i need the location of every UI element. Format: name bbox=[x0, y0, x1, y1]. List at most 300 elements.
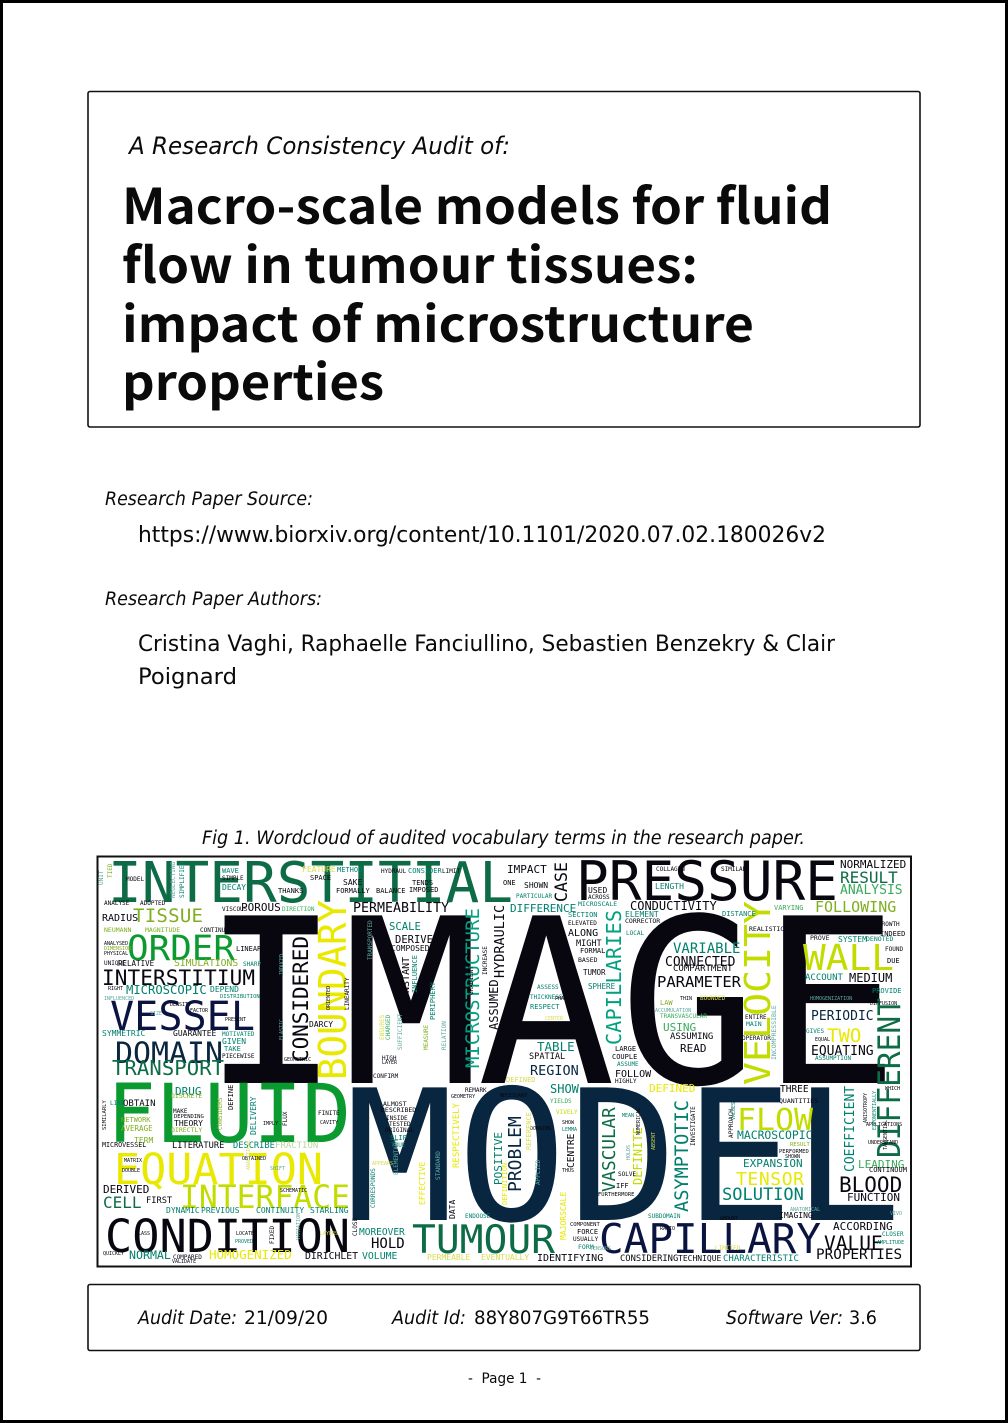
software version: 3.6 bbox=[849, 1308, 877, 1329]
small filler vocabulary: DOUBLE bbox=[122, 1168, 140, 1174]
small filler vocabulary: MICROSCALE bbox=[578, 900, 617, 908]
title bbox=[122, 168, 832, 415]
medium words: FRACTION bbox=[275, 1141, 318, 1151]
vertical words: CONSIDERED bbox=[289, 936, 313, 1062]
medium words: PERIODIC bbox=[811, 1009, 874, 1024]
medium words: DERIVED bbox=[103, 1183, 149, 1196]
medium words: HOMOGENIZED bbox=[209, 1247, 292, 1262]
medium words: PROPERTIES bbox=[816, 1247, 902, 1263]
large words: VESSEL bbox=[110, 994, 255, 1040]
small filler vocabulary: DISTANCE bbox=[722, 910, 756, 918]
small filler vocabulary: CONSIDERS bbox=[217, 1097, 224, 1130]
small filler vocabulary: THANKS bbox=[278, 887, 303, 895]
audit date: 21/09/20 bbox=[244, 1308, 328, 1329]
medium words: BLOOD bbox=[839, 1173, 902, 1197]
small filler vocabulary: TIED bbox=[107, 863, 114, 878]
small filler vocabulary: FORCE bbox=[577, 1228, 598, 1236]
small filler vocabulary: DIRECTION bbox=[282, 906, 315, 913]
small filler vocabulary: SHOWN bbox=[785, 1154, 800, 1160]
medium words: PREVIOUS bbox=[201, 1206, 240, 1215]
small filler vocabulary: NEGLECTING bbox=[170, 861, 177, 898]
audit id: 88Y807G9T66TR55 bbox=[474, 1308, 650, 1329]
vertical words bbox=[249, 862, 908, 1240]
large words: MICROSCOPIC bbox=[126, 983, 207, 997]
medium words: RESULT bbox=[840, 868, 898, 887]
small filler vocabulary: LINEARITY bbox=[344, 977, 351, 1010]
small filler vocabulary: NUMERICAL bbox=[636, 1108, 642, 1135]
small filler vocabulary: FORMALLY bbox=[336, 887, 371, 895]
small filler vocabulary: LEMMA bbox=[562, 1127, 577, 1133]
medium words: VALUE bbox=[824, 1232, 883, 1255]
large words: TISSUE bbox=[133, 905, 203, 927]
medium words: MICROVESSEL bbox=[102, 1141, 146, 1149]
small filler vocabulary: THICKNESS bbox=[530, 994, 563, 1001]
medium words: INTEGRATING bbox=[523, 1030, 576, 1039]
small filler vocabulary: VISCOUS bbox=[222, 906, 248, 913]
medium words: CONTINUITY bbox=[256, 1206, 304, 1215]
medium words: COMPARTMENT bbox=[673, 964, 733, 974]
small filler vocabulary: VARIATION bbox=[296, 1213, 302, 1240]
small filler vocabulary: FURTHERMORE bbox=[598, 1192, 634, 1198]
small filler vocabulary: SIMILAR bbox=[721, 866, 747, 873]
small filler vocabulary: SHOW bbox=[562, 1120, 575, 1126]
medium words: IMAGING bbox=[779, 1211, 813, 1220]
large words: TUMOUR bbox=[412, 1218, 556, 1263]
small filler vocabulary: DIFFUSION bbox=[870, 1001, 897, 1007]
small filler vocabulary: TENSORS bbox=[590, 1246, 611, 1252]
small filler vocabulary: WAVE bbox=[222, 867, 239, 875]
medium words: SYMMETRIC bbox=[102, 1029, 146, 1038]
small filler vocabulary: FEATURE bbox=[302, 865, 336, 874]
small filler vocabulary: LAYERS bbox=[320, 1231, 338, 1237]
small filler vocabulary: INSIDE bbox=[386, 1115, 408, 1122]
source label: Research Paper Source: bbox=[105, 489, 313, 510]
small filler vocabulary: MAKE bbox=[173, 1108, 188, 1115]
vertical words: ASSUMED bbox=[487, 979, 501, 1030]
small filler vocabulary: CONSIDER bbox=[408, 867, 443, 875]
medium words: IMPACT bbox=[507, 863, 547, 876]
small filler vocabulary: CONFIRM bbox=[373, 1073, 399, 1080]
small filler vocabulary: FLUX bbox=[282, 1111, 289, 1126]
small filler vocabulary: PERFORMED bbox=[779, 1149, 809, 1155]
vertical words: CONSTANT bbox=[401, 957, 412, 1005]
large words: PRESSURE bbox=[576, 850, 838, 913]
small filler vocabulary: QUICKLY bbox=[103, 1251, 124, 1257]
small filler vocabulary: TENDS bbox=[412, 879, 433, 887]
small filler vocabulary: APPROACH bbox=[728, 1109, 735, 1138]
small filler vocabulary: RATIO bbox=[660, 1226, 675, 1232]
medium words: VARIABLE bbox=[673, 941, 740, 957]
small filler vocabulary: CONTINUOUS bbox=[200, 927, 237, 934]
small filler vocabulary: GIVEN bbox=[222, 1037, 246, 1046]
small filler vocabulary: EFFECTIVE bbox=[418, 1161, 427, 1205]
small filler vocabulary: USUALLY bbox=[573, 1236, 599, 1243]
title: Macro-scale models for fluid bbox=[122, 168, 832, 239]
small filler vocabulary: SIMPLE bbox=[222, 875, 244, 882]
small filler vocabulary: TANGENTIAL bbox=[883, 1120, 889, 1150]
chart: word cloud bbox=[98, 850, 911, 1266]
medium words: DEFINED bbox=[506, 1076, 536, 1084]
small filler vocabulary: ENDOOSE bbox=[465, 1213, 491, 1220]
small filler vocabulary: TERM bbox=[134, 1136, 153, 1145]
large words: DOMAIN bbox=[115, 1036, 223, 1070]
small filler vocabulary: SHOWN bbox=[524, 881, 548, 890]
medium words: MEDIUM bbox=[849, 971, 892, 985]
small filler vocabulary: LOCAL bbox=[626, 930, 644, 937]
small filler vocabulary: INCREASE bbox=[482, 946, 489, 975]
small filler vocabulary: NETWORK bbox=[121, 1116, 151, 1124]
small filler vocabulary: CLOSE bbox=[352, 1218, 359, 1236]
medium words: COMPOSED bbox=[391, 944, 430, 953]
small filler vocabulary: PRESENT bbox=[225, 1017, 246, 1023]
small filler vocabulary: SPHERE bbox=[588, 982, 616, 991]
medium words: DESCRIBE bbox=[233, 1141, 275, 1151]
small filler vocabulary: ACROSS bbox=[588, 894, 610, 901]
small filler vocabulary: ASSUMPTION bbox=[815, 1055, 852, 1062]
medium words: CONSIDERING bbox=[620, 1254, 678, 1264]
small filler vocabulary: HOLDS bbox=[626, 1145, 632, 1160]
small filler vocabulary: ENSURES bbox=[379, 1014, 386, 1040]
large words: TWO bbox=[827, 1025, 861, 1047]
audit date bbox=[137, 1308, 328, 1329]
medium words: POROUS bbox=[241, 901, 281, 914]
small filler vocabulary: STANDARD bbox=[435, 1151, 442, 1180]
small filler vocabulary: APPLICATIONS bbox=[866, 1122, 902, 1128]
small filler vocabulary: ANALYTICAL bbox=[246, 1140, 252, 1170]
medium words: IDENTIFYING bbox=[537, 1253, 603, 1264]
medium words: SOLUTION bbox=[722, 1185, 804, 1205]
small filler vocabulary: CORRECTOR bbox=[625, 917, 660, 925]
small filler vocabulary: ENTIRE bbox=[745, 1014, 767, 1021]
vertical words: DEFINITION bbox=[501, 1163, 509, 1205]
vertical words: DEFINITE bbox=[631, 1127, 645, 1185]
medium words: CONDUCTIVITY bbox=[630, 899, 717, 913]
medium words: USING bbox=[663, 1021, 696, 1034]
small filler vocabulary: ASSUME bbox=[617, 1061, 639, 1068]
vertical words: ASYMPTOTIC bbox=[672, 1100, 693, 1212]
small filler vocabulary: NECESSARY bbox=[500, 1093, 527, 1099]
small filler vocabulary: RESPECT bbox=[530, 1003, 560, 1011]
small filler vocabulary: FOUND bbox=[885, 946, 903, 953]
small filler vocabulary: EXPONENTIALLY bbox=[872, 1091, 878, 1130]
small filler vocabulary: RESULT bbox=[790, 1142, 811, 1148]
large words: ORDER bbox=[127, 929, 236, 969]
small filler vocabulary: TESTED bbox=[389, 1121, 411, 1128]
small filler vocabulary: ANALYSED bbox=[104, 941, 128, 947]
vertical words: BOUNDARY bbox=[311, 900, 355, 1080]
vertical words: DIFFERENT bbox=[872, 998, 908, 1158]
small filler vocabulary: DEPEND bbox=[210, 985, 239, 994]
small filler vocabulary: THUS bbox=[562, 1168, 574, 1174]
small filler vocabulary: ORIGINAL bbox=[385, 1127, 414, 1134]
small filler vocabulary: LIMITED bbox=[715, 1245, 741, 1252]
small filler vocabulary: MATRIX bbox=[124, 1158, 142, 1164]
small filler vocabulary: DENOTED bbox=[866, 935, 893, 943]
large words: CAPILLARY bbox=[599, 1215, 821, 1263]
small filler vocabulary: RIGHT bbox=[108, 986, 123, 992]
small filler vocabulary: COMPONENT bbox=[570, 1222, 600, 1228]
small filler vocabulary: METHOD bbox=[337, 866, 362, 874]
medium words: ACCOUNT bbox=[805, 973, 844, 983]
small filler vocabulary: TRUE bbox=[391, 1142, 406, 1149]
medium words bbox=[102, 858, 907, 1264]
small filler vocabulary: SOLVE bbox=[618, 1171, 636, 1178]
small filler vocabulary: USED bbox=[588, 886, 607, 895]
small filler vocabulary: DISTRIBUTION bbox=[220, 994, 260, 1000]
small filler vocabulary: CAVITY bbox=[320, 1120, 338, 1126]
medium words: PERMEABLE bbox=[427, 1253, 471, 1262]
small filler vocabulary: INDEED bbox=[880, 930, 905, 938]
small filler vocabulary: NEUMANN bbox=[104, 926, 131, 934]
small filler vocabulary: TAKE bbox=[224, 1045, 241, 1053]
small filler vocabulary: MEAN bbox=[622, 1113, 634, 1119]
small filler vocabulary: PROVIDE bbox=[872, 987, 902, 995]
small filler vocabulary: DEPENDING bbox=[174, 1114, 204, 1120]
small filler vocabulary: PHASE bbox=[555, 996, 570, 1002]
small filler vocabulary: MAIN bbox=[746, 1020, 762, 1028]
medium words: DYNAMIC bbox=[166, 1206, 200, 1215]
medium words: FOLLOWING bbox=[815, 898, 896, 916]
small filler vocabulary: SCHEMATIC bbox=[280, 1188, 307, 1194]
large words: TENSOR bbox=[736, 1169, 804, 1190]
small filler vocabulary: AMPLITUDE bbox=[877, 1240, 904, 1246]
large words: EQUATION bbox=[114, 1145, 323, 1195]
medium words: CELL bbox=[103, 1193, 142, 1212]
vertical words: MAJORSCALE bbox=[559, 1192, 568, 1240]
small filler vocabulary: COLLAGEN bbox=[656, 866, 685, 873]
medium words: DEFINED bbox=[649, 1082, 695, 1095]
small filler vocabulary: FORMAL bbox=[580, 947, 605, 955]
medium words: EXPANSION bbox=[743, 1157, 803, 1170]
small filler vocabulary: BASED bbox=[578, 956, 598, 964]
large words: INTERSTITIUM bbox=[102, 966, 255, 990]
small filler vocabulary: ORIENTED bbox=[326, 986, 332, 1010]
vertical words: VELOCITY bbox=[738, 901, 779, 1085]
small filler vocabulary: ADOPTED bbox=[140, 900, 166, 907]
small filler vocabulary: DECAY bbox=[222, 883, 246, 892]
medium words: SIMULATIONS bbox=[174, 958, 238, 969]
small filler vocabulary: ASSESS bbox=[537, 984, 559, 991]
small filler vocabulary: REMARK bbox=[465, 1087, 487, 1094]
vertical words: DELIVERY bbox=[249, 1096, 258, 1135]
small filler vocabulary: INFLUENCED bbox=[104, 996, 134, 1002]
vertical words: HYDRAULIC bbox=[492, 905, 508, 978]
small filler vocabulary: FACTOR bbox=[190, 1008, 209, 1014]
medium words: STARLING bbox=[310, 1206, 349, 1215]
medium words: ASSUMING bbox=[670, 1032, 713, 1042]
small filler vocabulary: UNIQUE bbox=[104, 960, 126, 967]
small filler vocabulary: DOMAINS bbox=[530, 1126, 551, 1132]
panel: title box bbox=[88, 92, 920, 427]
large words: CONDITION bbox=[105, 1210, 350, 1263]
small filler vocabulary: SYSTEM bbox=[838, 935, 867, 944]
small filler vocabulary: OBTAINED bbox=[242, 1156, 266, 1162]
medium words: PERMEABILITY bbox=[353, 901, 449, 916]
small filler vocabulary: PHYSICAL bbox=[104, 951, 128, 957]
small filler vocabulary: CHARGED bbox=[385, 1014, 392, 1040]
authors label: Research Paper Authors: bbox=[105, 589, 322, 610]
medium words: FOLLOW bbox=[615, 1069, 652, 1080]
small filler vocabulary: GEOMETRIC bbox=[284, 1057, 311, 1063]
large words: INTERFACE bbox=[180, 1178, 350, 1216]
medium words: ANALYSIS bbox=[840, 883, 903, 898]
medium words: THEORY bbox=[174, 1119, 203, 1128]
small filler vocabulary: FORM bbox=[578, 1243, 594, 1251]
small filler vocabulary: ONE bbox=[503, 879, 516, 887]
medium words: REGION bbox=[530, 1063, 579, 1079]
medium words: HIGHLY bbox=[615, 1078, 637, 1085]
small filler vocabulary: WHICH bbox=[885, 1086, 900, 1092]
medium words: TECHNIQUE bbox=[678, 1254, 722, 1263]
small filler vocabulary: DISCRETE bbox=[171, 1092, 202, 1100]
small filler vocabulary: LIMIT bbox=[442, 868, 460, 875]
title: impact of microstructure bbox=[122, 286, 754, 357]
vertical words: INCOMPRESSIBLE bbox=[770, 1005, 778, 1060]
small filler vocabulary: COUPLE bbox=[612, 1053, 637, 1061]
small filler vocabulary: PIECEWISE bbox=[222, 1053, 255, 1060]
small filler vocabulary: CLOSER bbox=[882, 1231, 904, 1238]
small filler vocabulary: INVESTIGATE bbox=[690, 1106, 697, 1146]
large words: FLUID bbox=[107, 1068, 351, 1162]
small filler vocabulary: VALIDATE bbox=[172, 1259, 196, 1265]
small filler vocabulary bbox=[98, 861, 905, 1265]
large words: INTERSTITIAL bbox=[108, 851, 513, 916]
small filler vocabulary: MAGNITUDE bbox=[145, 926, 180, 934]
small filler vocabulary: PROVE bbox=[810, 934, 830, 942]
medium words: LEADING bbox=[858, 1158, 904, 1171]
small filler vocabulary: RELATIVE bbox=[118, 959, 155, 968]
small filler vocabulary: SIMILARLY bbox=[102, 1100, 108, 1130]
small filler vocabulary: FINITE bbox=[318, 1110, 340, 1117]
vertical words: COEFFICIENT bbox=[843, 1086, 858, 1172]
small filler vocabulary: SECTION bbox=[568, 911, 598, 919]
authors: Poignard bbox=[138, 664, 237, 690]
small filler vocabulary: ANALYSE bbox=[104, 900, 130, 907]
small filler vocabulary: ABSENT bbox=[651, 1132, 657, 1150]
small filler vocabulary: VARYING bbox=[774, 904, 804, 912]
medium words: MOREOVER bbox=[359, 1227, 405, 1238]
small filler vocabulary: GROWTH bbox=[878, 921, 900, 928]
small filler vocabulary: LARGE bbox=[615, 1045, 636, 1053]
small filler vocabulary: UNIT bbox=[98, 870, 105, 885]
medium words: DARCY bbox=[309, 1020, 333, 1029]
title: properties bbox=[122, 344, 384, 415]
small filler vocabulary: OPERATOR bbox=[742, 1035, 771, 1042]
medium words: QUANTITIES bbox=[779, 1097, 818, 1105]
figure caption: Fig 1. Wordcloud of audited vocabulary terms in the research paper. bbox=[202, 828, 805, 849]
small filler vocabulary: HYDRAUL bbox=[381, 868, 407, 875]
small filler vocabulary: CENTER bbox=[545, 1016, 564, 1022]
small filler vocabulary: GIVES bbox=[806, 1028, 824, 1035]
small filler vocabulary: DESCRIBED bbox=[381, 1106, 416, 1114]
small filler vocabulary: SUFFICIENT bbox=[397, 1013, 404, 1050]
vertical words: MICROSTRUCTURE bbox=[462, 908, 484, 1068]
medium words: CONTINUUM bbox=[869, 1166, 907, 1174]
medium words: TABLE bbox=[537, 1039, 575, 1054]
small filler vocabulary: UNDERSTAND bbox=[868, 1140, 898, 1146]
medium words: FUNCTION bbox=[847, 1191, 900, 1204]
small filler vocabulary: AMOUNT bbox=[720, 1216, 738, 1222]
small filler vocabulary: RELATION bbox=[441, 1021, 448, 1050]
small filler vocabulary: YIELDS bbox=[550, 1098, 572, 1105]
medium words: ACCORDING bbox=[833, 1220, 893, 1233]
medium words: EVENTUALLY bbox=[481, 1253, 529, 1262]
small filler vocabulary: LENGTH bbox=[655, 882, 684, 891]
small filler vocabulary: LINEAR bbox=[236, 945, 262, 953]
small filler vocabulary: HOMOGENIZATION bbox=[810, 996, 852, 1002]
large words: FLOW bbox=[737, 1103, 814, 1138]
source URL: https://www.biorxiv.org/content/10.1101/2020.07.02.180026v2 bbox=[138, 522, 826, 548]
small filler vocabulary: MEASURE bbox=[423, 1024, 430, 1050]
page number: - Page 1 - bbox=[468, 1371, 541, 1387]
small filler vocabulary: LAYER bbox=[382, 1060, 398, 1066]
audit date: Audit Date: bbox=[137, 1308, 237, 1329]
title: flow in tumour tissues: bbox=[122, 227, 698, 298]
small filler vocabulary: DIMENSION bbox=[104, 946, 131, 952]
small filler vocabulary: SAKE bbox=[343, 878, 362, 887]
medium words: THREE bbox=[780, 1084, 809, 1095]
panel: audit footer bbox=[88, 1284, 920, 1350]
authors bbox=[138, 631, 836, 690]
medium words: DIRICHLET bbox=[305, 1251, 358, 1262]
small filler vocabulary: IMPLY bbox=[263, 1121, 278, 1127]
small filler vocabulary: INFLUENCE bbox=[411, 955, 419, 993]
audit id: Audit Id: bbox=[391, 1308, 466, 1329]
medium words: HOLD bbox=[371, 1236, 405, 1252]
small filler vocabulary: GRADIENT bbox=[468, 966, 475, 995]
small filler vocabulary: REFERENCE bbox=[525, 1112, 533, 1150]
small filler vocabulary: IFF bbox=[616, 1182, 629, 1190]
small filler vocabulary: MIGHT bbox=[576, 939, 602, 949]
small filler vocabulary: GEOMETRY bbox=[451, 1094, 475, 1100]
small filler vocabulary: PROVED bbox=[235, 1239, 253, 1245]
vertical words: CAPILLARIES bbox=[602, 910, 626, 1045]
small filler vocabulary: BALANCE bbox=[376, 887, 406, 895]
small filler vocabulary: VIVO bbox=[890, 1211, 902, 1217]
small filler vocabulary: BOUNDED bbox=[700, 995, 726, 1002]
small filler vocabulary: ANISOTROPY bbox=[863, 1093, 869, 1123]
small filler vocabulary: TRANSPORTED bbox=[367, 920, 374, 960]
small filler vocabulary: SIZE bbox=[150, 1011, 162, 1017]
small filler vocabulary: COMPARED bbox=[173, 1254, 202, 1261]
small filler vocabulary: ALONG bbox=[568, 928, 598, 939]
medium words: SHOW bbox=[550, 1082, 580, 1096]
medium words: VOLUME bbox=[362, 1251, 397, 1262]
small filler vocabulary: MODEL bbox=[126, 876, 144, 883]
small filler vocabulary: THIN bbox=[680, 996, 692, 1002]
vertical words: RESPECTIVELY bbox=[452, 1102, 462, 1168]
small filler vocabulary: DIRECTLY bbox=[171, 1126, 202, 1134]
small filler vocabulary: DENSITY bbox=[170, 1002, 191, 1008]
small filler vocabulary: HIGH bbox=[382, 1055, 397, 1062]
authors: Cristina Vaghi, Raphaelle Fanciullino, Sebastien Benzekry & Clair bbox=[138, 631, 836, 657]
small filler vocabulary: PERIPHERY bbox=[429, 981, 437, 1020]
medium words: SCALE bbox=[389, 921, 421, 933]
small filler vocabulary: DEFINE bbox=[227, 1085, 235, 1110]
large words: IMAGE bbox=[202, 871, 899, 1138]
small filler vocabulary: ELEMENT bbox=[625, 910, 659, 919]
small filler vocabulary: FIXED bbox=[269, 1226, 276, 1244]
small filler vocabulary: DATA bbox=[448, 1200, 457, 1219]
medium words: GUARANTEE bbox=[173, 1029, 217, 1038]
medium words: DIFFERENCE bbox=[510, 902, 576, 915]
medium words: NORMAL bbox=[129, 1248, 171, 1262]
small filler vocabulary: SPACE bbox=[310, 874, 331, 882]
small filler vocabulary: PARTICULAR bbox=[516, 893, 553, 900]
medium words: PARAMETER bbox=[657, 973, 742, 991]
small filler vocabulary: LAW bbox=[660, 999, 673, 1007]
vertical words: POSITIVE bbox=[492, 1132, 505, 1185]
